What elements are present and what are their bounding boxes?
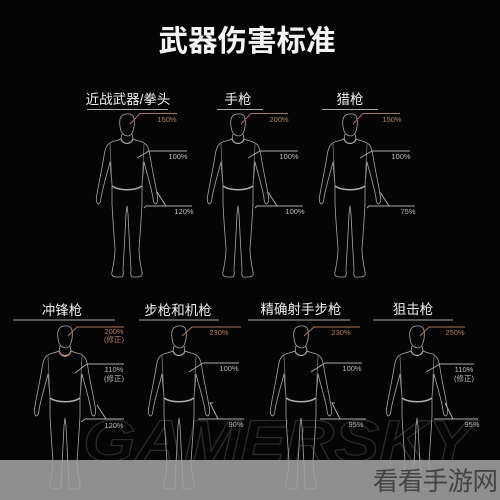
figure: melee [96, 114, 158, 277]
callout: head 200% corrected [68, 327, 124, 344]
heading: sniper rifle: 狙击枪 [393, 301, 434, 317]
heading: marksman rifle: 精确射手步枪 [260, 301, 342, 317]
callout: torso 110% corrected: 110% [455, 365, 474, 374]
callout: legs 90%: 90% [228, 420, 244, 429]
callout: head 230% [182, 327, 241, 337]
callout: head 200% corrected: 200% [104, 327, 124, 336]
callout: torso 100%: 100% [391, 152, 411, 161]
callout: legs 120%: 120% [104, 421, 124, 430]
panel: SMG [13, 302, 124, 489]
callout: legs 120% [81, 405, 124, 430]
callout: legs 95% [434, 403, 480, 429]
callout: legs 100% [255, 192, 305, 216]
callout: head 150% [353, 114, 402, 124]
callout: torso 100%: 100% [342, 364, 362, 373]
heading: shotgun: 猎枪 [336, 91, 364, 107]
panel: shotgun [319, 91, 416, 277]
callout: head 230%: 230% [331, 328, 351, 337]
panel: marksman rifle [248, 301, 366, 489]
callout: torso 100% [360, 151, 411, 161]
callout: torso 110% corrected [75, 364, 124, 383]
panel: sniper rifle [373, 301, 480, 489]
callout: torso 100%: 100% [168, 152, 188, 161]
panel: pistol [207, 91, 305, 277]
callout: torso 110% corrected: (修正) [454, 373, 474, 383]
panel: rifle and machine gun [139, 302, 244, 489]
callout: head 150% [130, 114, 177, 124]
callout: legs 95%: 95% [348, 420, 364, 429]
footer band [0, 460, 500, 500]
callout: head 150%: 150% [157, 115, 177, 124]
figure: shotgun [319, 114, 381, 277]
heading: melee: 近战武器/拳头 [86, 92, 170, 107]
callout: legs 75% [367, 192, 416, 216]
callout: head 200%: 200% [269, 115, 289, 124]
callout: head 200% corrected: (修正) [104, 334, 124, 344]
footer watermark text: 看看手游网 [373, 468, 498, 496]
callout: legs 95% [320, 403, 366, 429]
title: 武器伤害标准 [158, 25, 336, 58]
figure: sniper [386, 326, 448, 489]
callout: head 150%: 150% [382, 115, 402, 124]
callout: legs 75%: 75% [400, 207, 416, 216]
panel: melee [86, 92, 194, 277]
figure: SMG [34, 326, 96, 489]
callout: torso 100% [311, 363, 362, 373]
figure: pistol [207, 114, 269, 277]
callout: torso 110% corrected [426, 364, 474, 383]
callout: legs 95%: 95% [464, 420, 480, 429]
callout: head 230%: 230% [209, 328, 229, 337]
callout: legs 120%: 120% [174, 207, 194, 216]
callout: torso 110% corrected: (修正) [104, 373, 124, 383]
callout: torso 110% corrected: 110% [105, 365, 124, 374]
heading: rifle and machine gun: 步枪和机枪 [144, 302, 212, 318]
callout: torso 100% [189, 363, 239, 373]
callout: head 250% [420, 327, 465, 337]
figure: rifle [148, 326, 210, 489]
callout: torso 100%: 100% [279, 152, 299, 161]
callout: torso 100% [248, 151, 299, 161]
heading: SMG: 冲锋枪 [42, 302, 83, 318]
icon: orange collar highlight [59, 351, 71, 356]
callout: head 250%: 250% [445, 328, 465, 337]
callout: torso 100% [137, 151, 188, 161]
watermark: GAMERSKY: GAMERSKY [83, 409, 479, 474]
callout: torso 100%: 100% [219, 364, 239, 373]
callout: legs 90% [198, 403, 244, 429]
heading: pistol: 手枪 [224, 91, 252, 107]
callout: legs 100%: 100% [285, 207, 305, 216]
callout: head 230% [304, 327, 360, 337]
figure: marksman [270, 326, 332, 489]
callout: head 200% [241, 114, 289, 124]
callout: legs 120% [144, 192, 194, 216]
